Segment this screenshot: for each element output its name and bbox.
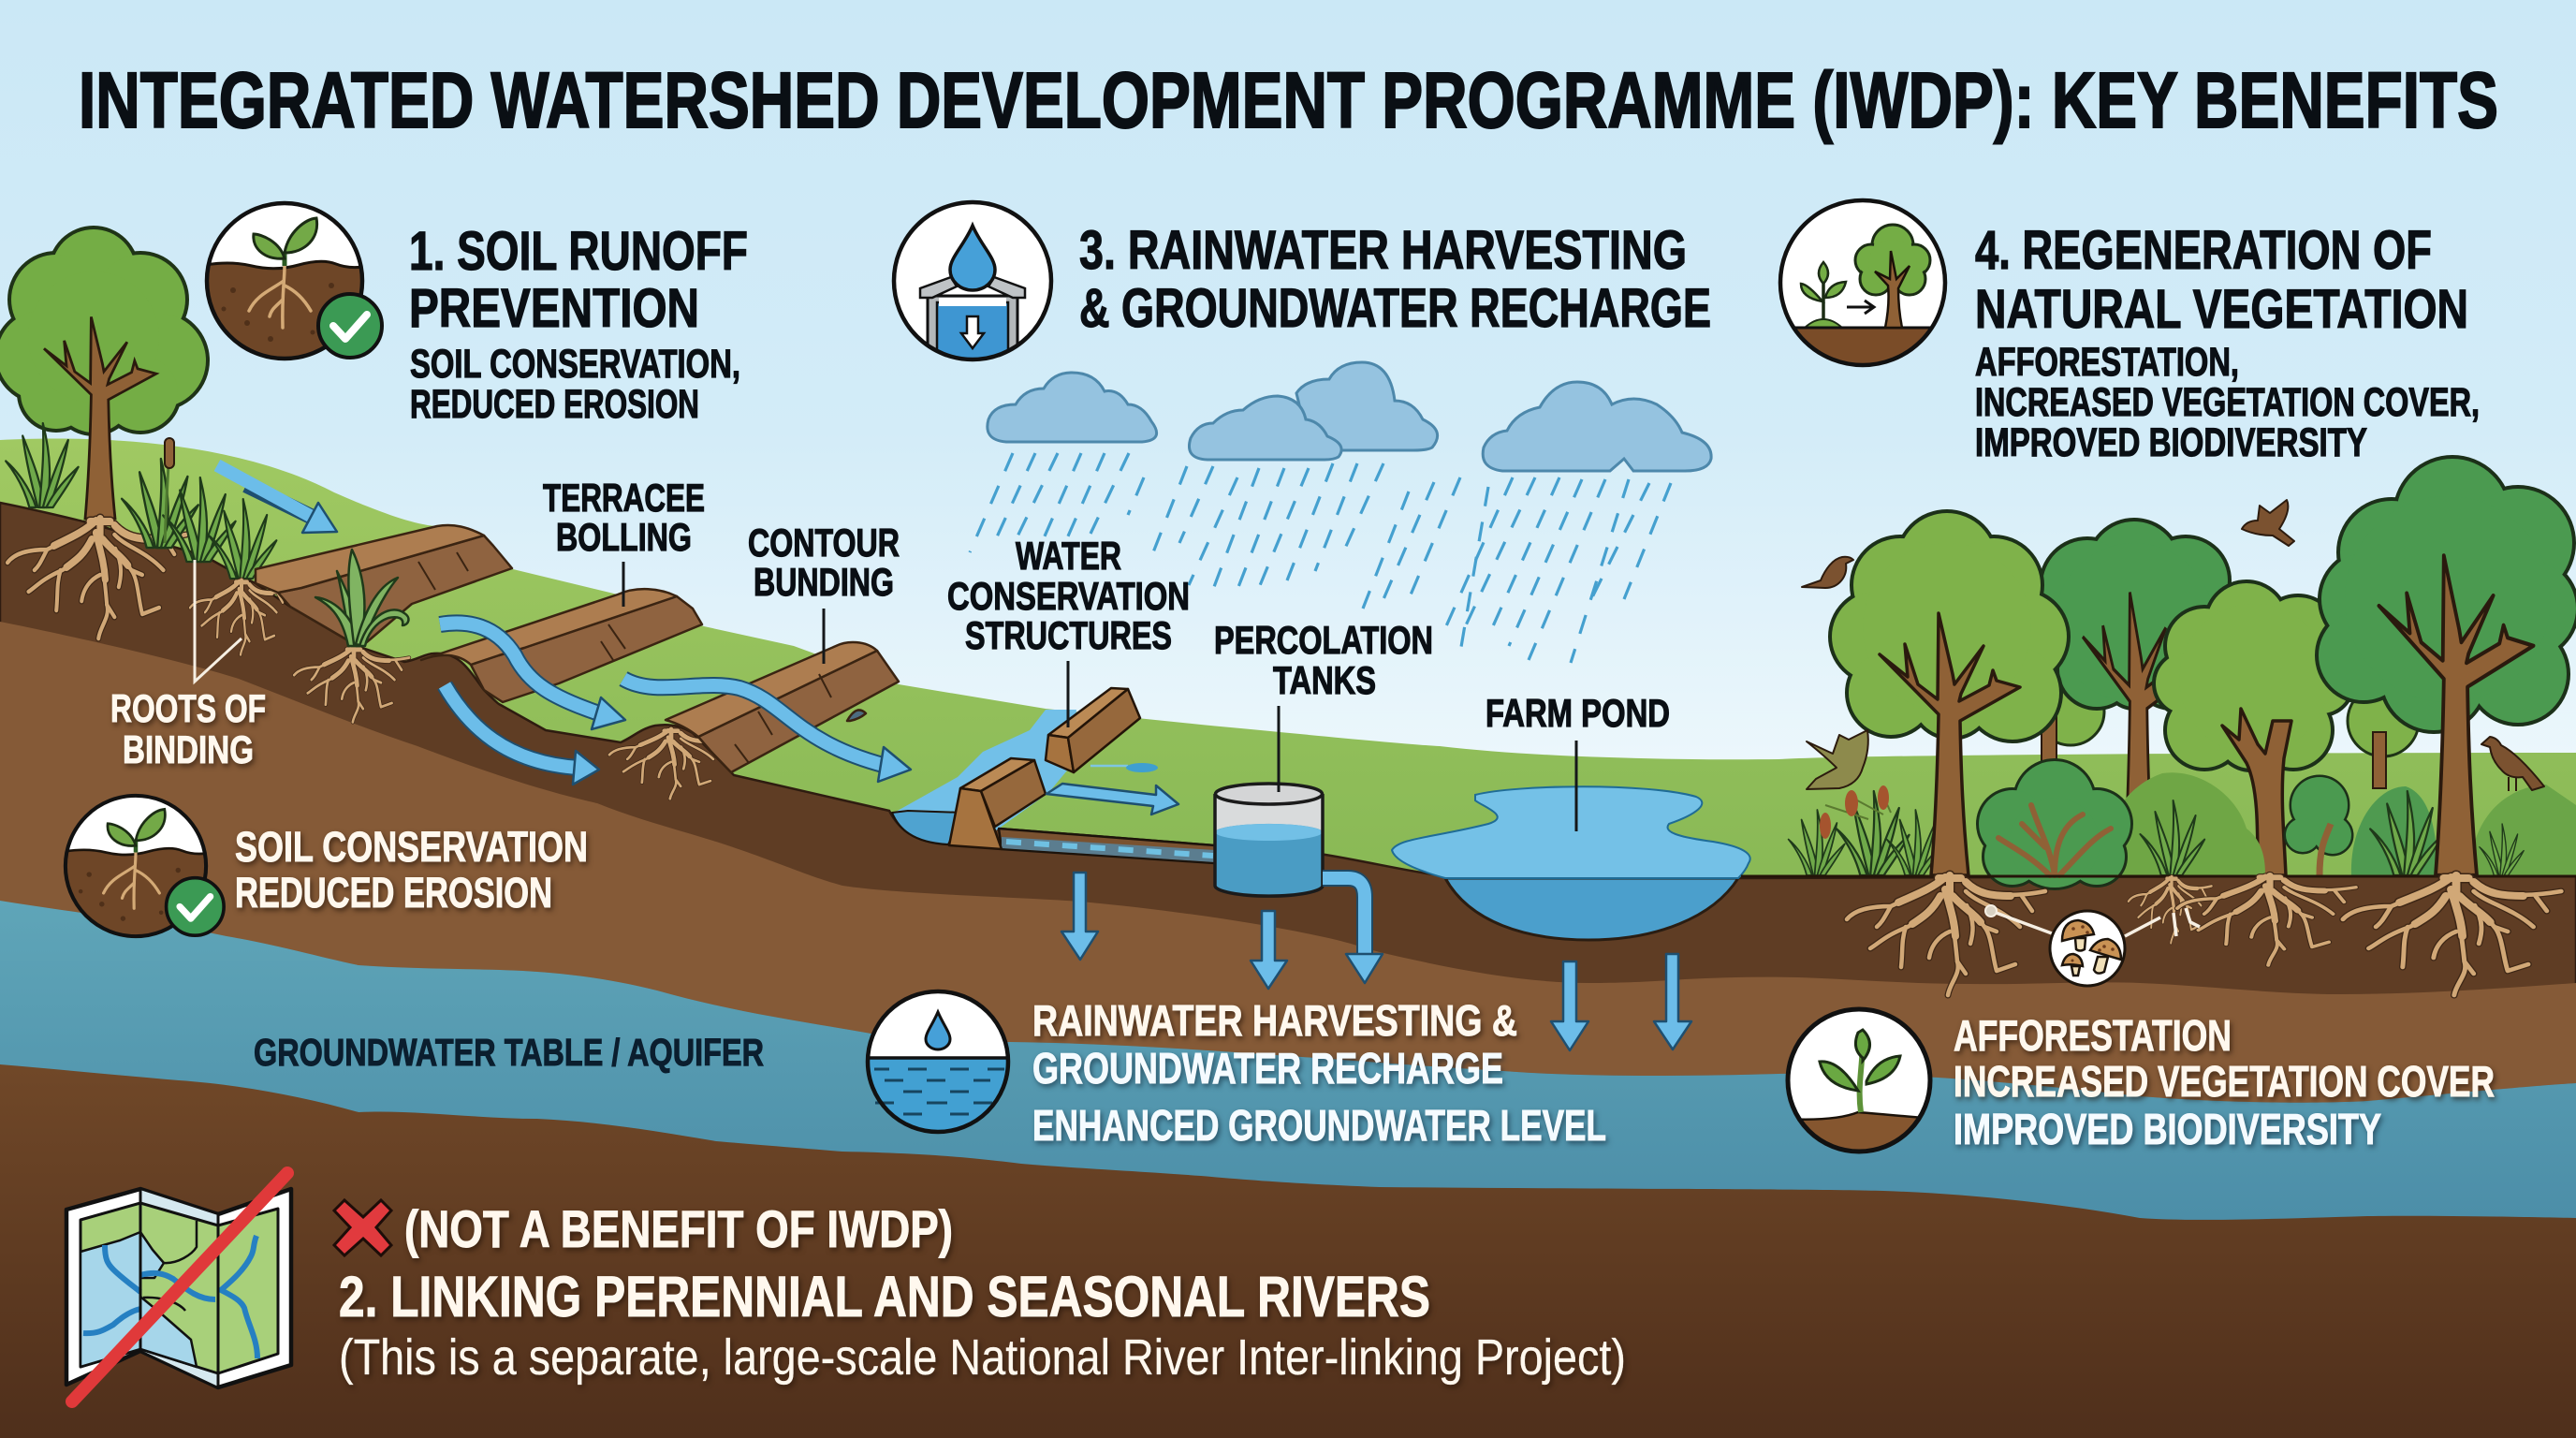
label: percolation tanks bbox=[1214, 618, 1433, 792]
text: afforestation callout: IMPROVED BIODIVERSITY bbox=[1954, 1105, 2381, 1153]
forest roots bbox=[1847, 875, 2561, 995]
buried recharge pipe bbox=[999, 829, 1215, 863]
terrace 3 bbox=[666, 642, 899, 772]
text: not a benefit: (NOT A BENEFIT OF IWDP) bbox=[404, 1199, 953, 1258]
light subsoil bbox=[0, 622, 2576, 1438]
label: percolation tanks: PERCOLATION bbox=[1214, 618, 1433, 662]
icon: afforestation sapling bbox=[1783, 1009, 1933, 1156]
right field forest: back layer bbox=[2037, 678, 2419, 788]
stream channel bbox=[892, 710, 1076, 844]
left tree roots bbox=[7, 519, 186, 638]
heading: section 4 bbox=[1975, 220, 2468, 340]
label: roots of binding: BINDING bbox=[123, 727, 254, 771]
icon: soil conservation badge (section 1) bbox=[200, 203, 382, 365]
label: water conservation structures: CONSERVATION bbox=[947, 574, 1190, 618]
heading: section 3: & GROUNDWATER RECHARGE bbox=[1079, 278, 1711, 339]
text: groundwater recharge callout: RAINWATER HARVESTING & bbox=[1032, 996, 1517, 1045]
birds bbox=[1802, 500, 2544, 791]
heading: section 1: 1. SOIL RUNOFF bbox=[409, 221, 748, 282]
text: section 4 benefits: AFFORESTATION, bbox=[1975, 340, 2239, 385]
label: contour bunding: CONTOUR bbox=[748, 521, 900, 565]
heading: section 4: NATURAL VEGETATION bbox=[1975, 279, 2468, 340]
rain bbox=[970, 453, 1671, 663]
heading: section 3: 3. RAINWATER HARVESTING bbox=[1079, 220, 1687, 281]
aquifer band bbox=[0, 901, 2576, 1220]
label: terracee bolling bbox=[543, 476, 705, 607]
heading: section 1: PREVENTION bbox=[409, 278, 699, 339]
text: soil conservation callout: REDUCED EROSION bbox=[235, 869, 552, 917]
left tree bbox=[0, 229, 206, 519]
percolation tank bbox=[1215, 784, 1323, 896]
text: groundwater recharge callout bbox=[1032, 996, 1606, 1150]
text: groundwater recharge callout: GROUNDWATER RECHARGE bbox=[1032, 1044, 1503, 1093]
farm pond bbox=[1392, 786, 1750, 940]
text: section 1 benefits: SOIL CONSERVATION, bbox=[410, 342, 740, 387]
label: water conservation structures: STRUCTURES bbox=[965, 613, 1172, 657]
label: farm pond: FARM POND bbox=[1486, 691, 1670, 735]
grass plant on terrace bbox=[315, 550, 408, 646]
terrace 2 bbox=[421, 589, 702, 702]
text: groundwater recharge callout: ENHANCED GROUNDWATER LEVEL bbox=[1032, 1101, 1606, 1150]
dark topsoil bbox=[0, 503, 2576, 1030]
label: contour bunding bbox=[748, 521, 900, 664]
label: contour bunding: BUNDING bbox=[754, 560, 894, 604]
terrace 1 bbox=[256, 525, 512, 646]
text: section 4 benefits: IMPROVED BIODIVERSITY bbox=[1975, 420, 2367, 465]
icon: soil conservation small badge bbox=[60, 796, 224, 942]
water conservation structures: stream and check dams bbox=[892, 688, 1215, 863]
text: river inter-linking note: (This is a separate, large-scale National River Inter-linking Project) bbox=[339, 1329, 1626, 1386]
text: soil conservation callout: SOIL CONSERVATION bbox=[235, 823, 588, 871]
tree C bbox=[2156, 583, 2351, 875]
tree A bbox=[1832, 513, 2067, 740]
mushroom fungi badge bbox=[1985, 905, 2200, 986]
icon: sapling to tree bbox=[1778, 200, 1947, 374]
label: groundwater table / aquifer: GROUNDWATER TABLE / AQUIFER bbox=[254, 1031, 764, 1074]
hillside grasses and roots bbox=[6, 423, 728, 799]
icon: water level bbox=[866, 991, 1011, 1137]
clouds bbox=[988, 362, 1711, 471]
text: section 1 benefits: REDUCED EROSION bbox=[410, 382, 699, 427]
text: afforestation callout bbox=[1954, 1011, 2495, 1153]
label: terracee bolling: TERRACEE bbox=[543, 476, 705, 520]
label: roots of binding bbox=[110, 560, 266, 771]
text: afforestation callout: AFFORESTATION bbox=[1954, 1011, 2232, 1060]
runoff flow arrows bbox=[217, 465, 911, 785]
icon: river map crossed out bbox=[66, 1173, 291, 1401]
icon: rainwater harvesting tank bbox=[894, 202, 1051, 371]
text: soil conservation callout bbox=[235, 823, 588, 917]
heading: section 2: 2. LINKING PERENNIAL AND SEASONAL RIVERS bbox=[339, 1265, 1430, 1328]
recharge arrows bbox=[1061, 873, 1691, 1050]
icon: red cross bbox=[334, 1200, 391, 1255]
label: water conservation structures bbox=[947, 534, 1190, 727]
deep bedrock soil bbox=[0, 901, 2576, 1438]
seepage puddle bbox=[1090, 765, 1128, 767]
tree D bbox=[2319, 459, 2576, 730]
foreground tree trunks bbox=[1880, 555, 2533, 875]
text: section 1 benefits bbox=[410, 342, 740, 427]
label: water conservation structures: WATER bbox=[1016, 534, 1121, 578]
label: roots of binding: ROOTS OF bbox=[110, 686, 266, 730]
terraces and contour bunds bbox=[256, 525, 899, 772]
stream outflow arrow bbox=[1046, 784, 1178, 814]
heading: section 1 bbox=[409, 221, 748, 339]
heading: section 4: 4. REGENERATION OF bbox=[1975, 220, 2432, 281]
green hillside and fields bbox=[0, 439, 2576, 899]
label: percolation tanks: TANKS bbox=[1273, 658, 1376, 702]
label: terracee bolling: BOLLING bbox=[556, 515, 692, 559]
bushes and shrubs bbox=[0, 761, 2576, 888]
text: section 4 benefits bbox=[1975, 340, 2480, 465]
tree B bbox=[2031, 521, 2237, 875]
check dams bbox=[949, 688, 1140, 849]
heading: section 3 bbox=[1079, 220, 1711, 339]
